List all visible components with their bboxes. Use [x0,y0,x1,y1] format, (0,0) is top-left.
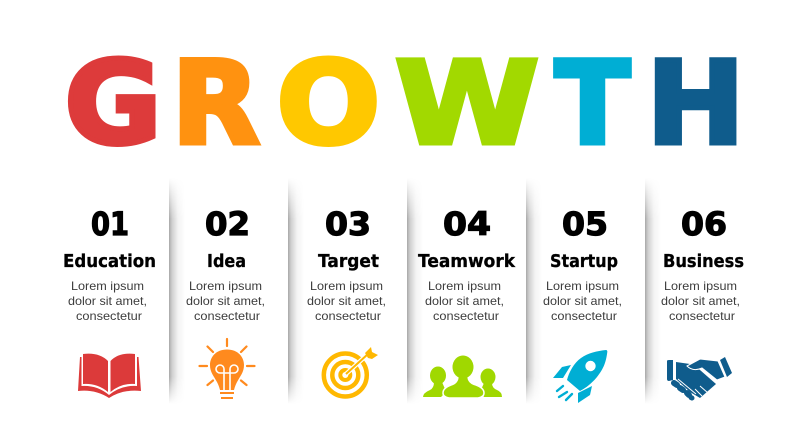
column 05: consectetur [551,309,617,323]
column 06 [661,205,744,323]
column 05: Startup [550,252,618,272]
column 03: 03 [325,205,371,243]
column 04: Lorem ipsum [428,279,501,293]
column 01: dolor sit amet, [68,294,147,308]
column 03: consectetur [315,309,381,323]
column 06: Business [663,252,744,272]
column 04: Teamwork [418,252,515,272]
title: GROWTH: R [172,37,260,170]
column 05: 05 [562,205,608,243]
icon: book [78,354,141,398]
column 02 [186,205,265,323]
icon: team [423,355,502,398]
column 06: consectetur [669,309,735,323]
title: GROWTH: H [647,37,745,170]
column 02: dolor sit amet, [186,294,265,308]
column 04: consectetur [433,309,499,323]
title: GROWTH: W [395,37,539,170]
title: GROWTH: T [555,37,630,170]
column 02: Idea [207,252,246,272]
column 06: dolor sit amet, [661,294,740,308]
column 01 [63,205,156,323]
column 06: Lorem ipsum [664,279,737,293]
icon: light bulb [200,339,254,398]
column 03: Target [318,252,379,272]
title: GROWTH: G [65,37,162,170]
column 04 [418,205,515,323]
title: GROWTH: O [277,37,380,170]
column 02: 02 [205,205,250,243]
column 01: Education [63,252,156,272]
column 05 [543,205,622,323]
icon: handshake [667,357,732,398]
column 06: 06 [681,205,727,243]
title: GROWTH [65,37,745,170]
column 01: Lorem ipsum [71,279,144,293]
column 02: Lorem ipsum [189,279,262,293]
icon: rocket [553,350,607,403]
column 03: dolor sit amet, [307,294,386,308]
column 01: 01 [91,205,129,243]
column 01: consectetur [76,309,142,323]
column 03 [307,205,386,323]
panel shadows [169,178,661,404]
column 05: dolor sit amet, [543,294,622,308]
column 04: dolor sit amet, [425,294,504,308]
icon: target [324,347,378,396]
column 03: Lorem ipsum [310,279,383,293]
column 05: Lorem ipsum [546,279,619,293]
column 04: 04 [443,205,491,243]
column 02: consectetur [194,309,260,323]
